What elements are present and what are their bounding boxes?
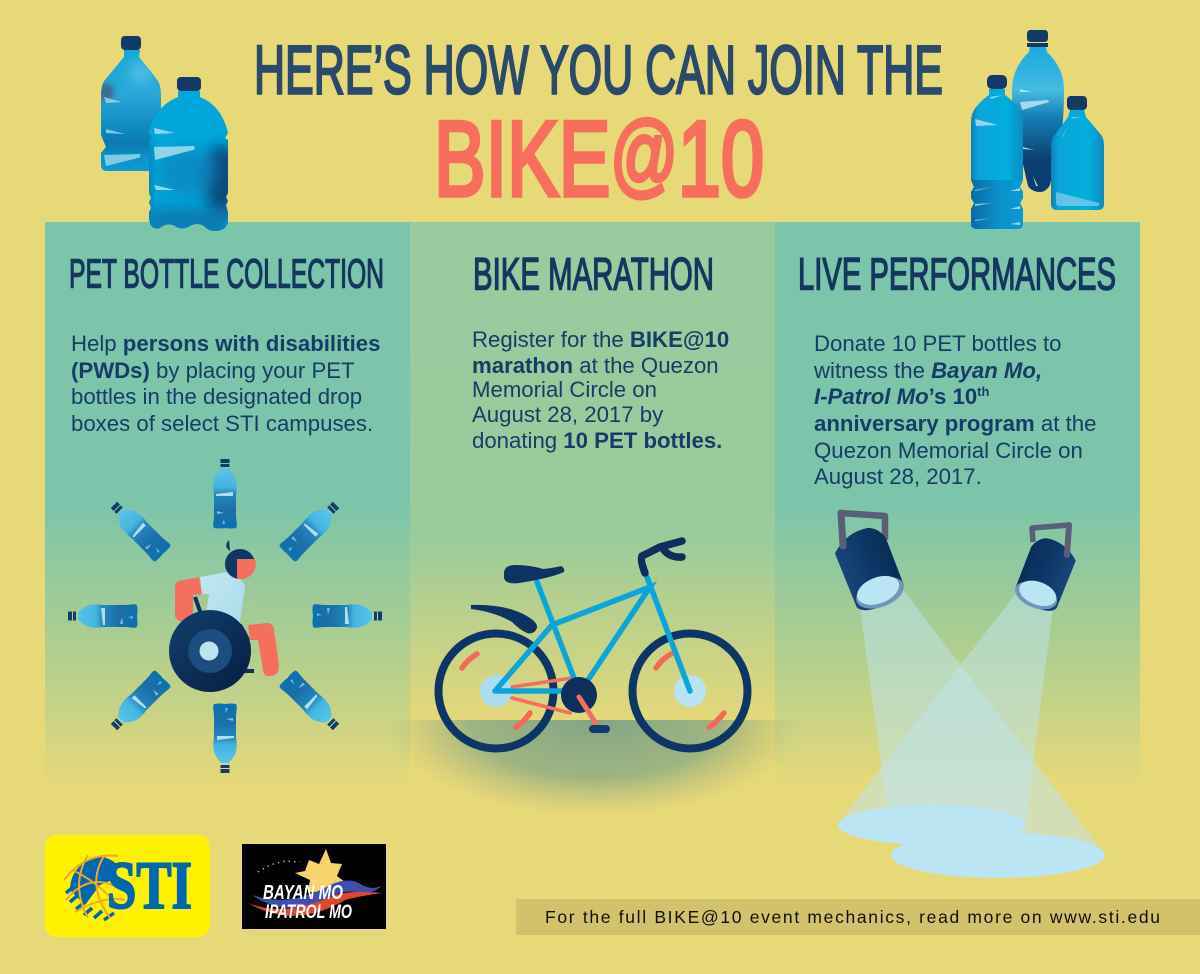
wordmark: STI	[107, 847, 192, 923]
chain	[512, 678, 572, 713]
seat	[504, 565, 564, 583]
left bottle	[971, 75, 1023, 229]
title highlight: BIKE@10: 10	[678, 98, 764, 218]
text: bike marathon description: donating 10 PET bottles.	[472, 428, 722, 453]
ribbon	[252, 880, 382, 908]
stars	[258, 861, 300, 872]
right lamp	[1011, 525, 1080, 616]
text: live performances description: witness the Bayan Mo,	[814, 358, 1042, 383]
handlebar	[641, 541, 682, 573]
text: live performances description: anniversary program at the	[814, 411, 1096, 436]
text: PET bottle collection description: (PWDs) by placing your PET	[71, 358, 354, 383]
title highlight: BIKE@10: BIKE	[434, 98, 678, 218]
mudguard	[471, 605, 537, 633]
head	[225, 549, 255, 579]
frame	[495, 577, 690, 691]
heading: PET bottle collection: PET BOTTLE COLLECTION	[69, 250, 384, 296]
front bottle	[149, 77, 228, 231]
text: bike marathon description: August 28, 2017 by	[472, 402, 664, 427]
icon: right group of PET bottles	[971, 30, 1104, 229]
crank	[561, 677, 597, 713]
light pools	[838, 805, 1026, 845]
text: bike marathon description: Register for the BIKE@10	[472, 327, 729, 352]
footer note	[516, 899, 1200, 935]
icon: spotlights with beams	[830, 513, 1105, 878]
text: bike marathon description: Memorial Circle on	[472, 377, 657, 402]
hubs	[480, 675, 512, 707]
leg	[248, 623, 279, 676]
panel: PET bottle collection	[45, 222, 410, 792]
logo: Bayan Mo iPatrol Mo: IPATROL MO	[265, 902, 352, 923]
icon: person in wheelchair	[169, 540, 279, 692]
wheel	[169, 610, 251, 692]
title	[254, 32, 943, 218]
footer note: For the full BIKE@10 event mechanics, read more on www.sti.edu	[545, 907, 1160, 927]
left lamp	[830, 513, 908, 616]
text: bike marathon description: marathon at the Quezon	[472, 353, 719, 378]
front wheel	[632, 634, 748, 748]
text: live performances description: Quezon Memorial Circle on	[814, 438, 1083, 463]
left beam	[860, 588, 1098, 845]
middle bottle	[1012, 30, 1064, 192]
icon: ring of PET bottles	[68, 459, 382, 773]
logo: STI	[45, 835, 210, 937]
rear wheel	[438, 634, 554, 748]
panel: bike marathon	[410, 222, 775, 725]
text: live performances description: August 28, 2017.	[814, 464, 982, 489]
text: PET bottle collection description: bottles in the designated drop	[71, 384, 362, 409]
torso	[200, 572, 245, 632]
panel: live performances	[775, 222, 1140, 792]
icon: left pair of PET bottles	[101, 36, 228, 231]
text: live performances description: th	[977, 384, 990, 399]
globe	[64, 855, 125, 920]
ground shadow	[385, 720, 805, 820]
text: PET bottle collection description: Help persons with disabilities	[71, 331, 380, 356]
text: live performances description: Donate 10 PET bottles to	[814, 331, 1062, 356]
text: live performances description: I-Patrol Mo’s 10	[814, 384, 977, 409]
wheel reflections	[462, 654, 724, 727]
heading: bike marathon: BIKE MARATHON	[473, 248, 714, 300]
logo: Bayan Mo iPatrol Mo	[242, 844, 386, 929]
chair frame	[195, 597, 254, 671]
wordmark: BAYAN MO	[263, 882, 343, 904]
arm	[175, 577, 202, 622]
text: PET bottle collection description: boxes of select STI campuses.	[71, 411, 373, 436]
sun	[295, 849, 345, 892]
back bottle	[98, 36, 162, 171]
icon: bicycle	[438, 541, 748, 748]
right bottle	[1051, 96, 1104, 210]
title highlight: BIKE@10: @	[610, 104, 678, 206]
right beam	[843, 592, 1053, 828]
